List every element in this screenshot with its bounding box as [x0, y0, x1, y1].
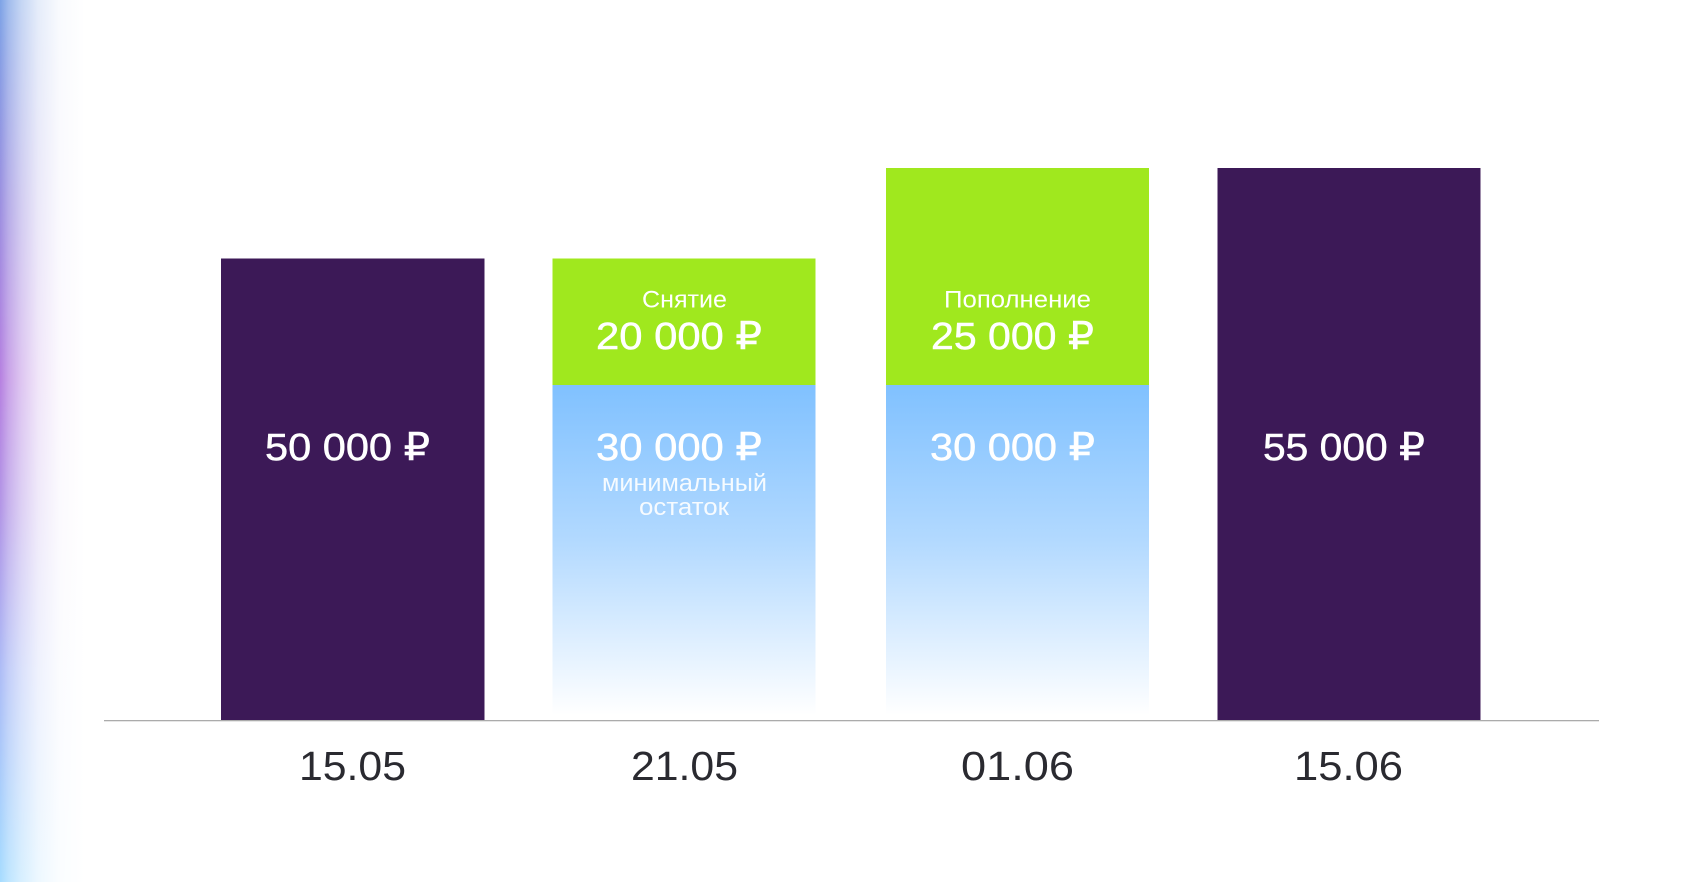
date 15.05: 15.05 [299, 743, 406, 789]
bar 15.05: balance 50 000 [221, 258, 484, 720]
segment: withdrawal 20 000: Снятие [642, 287, 727, 314]
segment: minimum balance 30 000: 30 000 ₽ [596, 427, 762, 469]
value 50 000 ₽: 50 000 ₽ [265, 427, 430, 469]
segment: top-up 25 000: Пополнение [944, 287, 1091, 314]
date 01.06: 01.06 [961, 743, 1074, 789]
segment: top-up 25 000 [886, 168, 1149, 385]
bar 21.05: withdrawal and minimum balance [552, 258, 816, 715]
segment: minimum balance 30 000: остаток [639, 494, 730, 521]
date labels [299, 743, 1403, 789]
horizontal axis line [104, 720, 1599, 721]
left edge gradient glow [0, 0, 85, 882]
value 55 000 ₽: 55 000 ₽ [1263, 427, 1425, 469]
segment: withdrawal 20 000 [552, 258, 816, 385]
date 21.05: 21.05 [631, 743, 738, 789]
bar 15.06: balance 55 000 [1218, 168, 1480, 720]
segment: minimum balance 30 000 [886, 385, 1149, 715]
bar 01.06: top-up and minimum balance [886, 168, 1149, 715]
segment: withdrawal 20 000: 20 000 ₽ [596, 316, 762, 358]
date 15.06: 15.06 [1294, 743, 1403, 789]
segment: top-up 25 000: 25 000 ₽ [931, 316, 1094, 358]
segment: minimum balance 30 000: минимальный [602, 470, 767, 497]
segment: minimum balance 30 000 [552, 385, 816, 715]
segment: minimum balance 30 000: 30 000 ₽ [930, 427, 1095, 469]
